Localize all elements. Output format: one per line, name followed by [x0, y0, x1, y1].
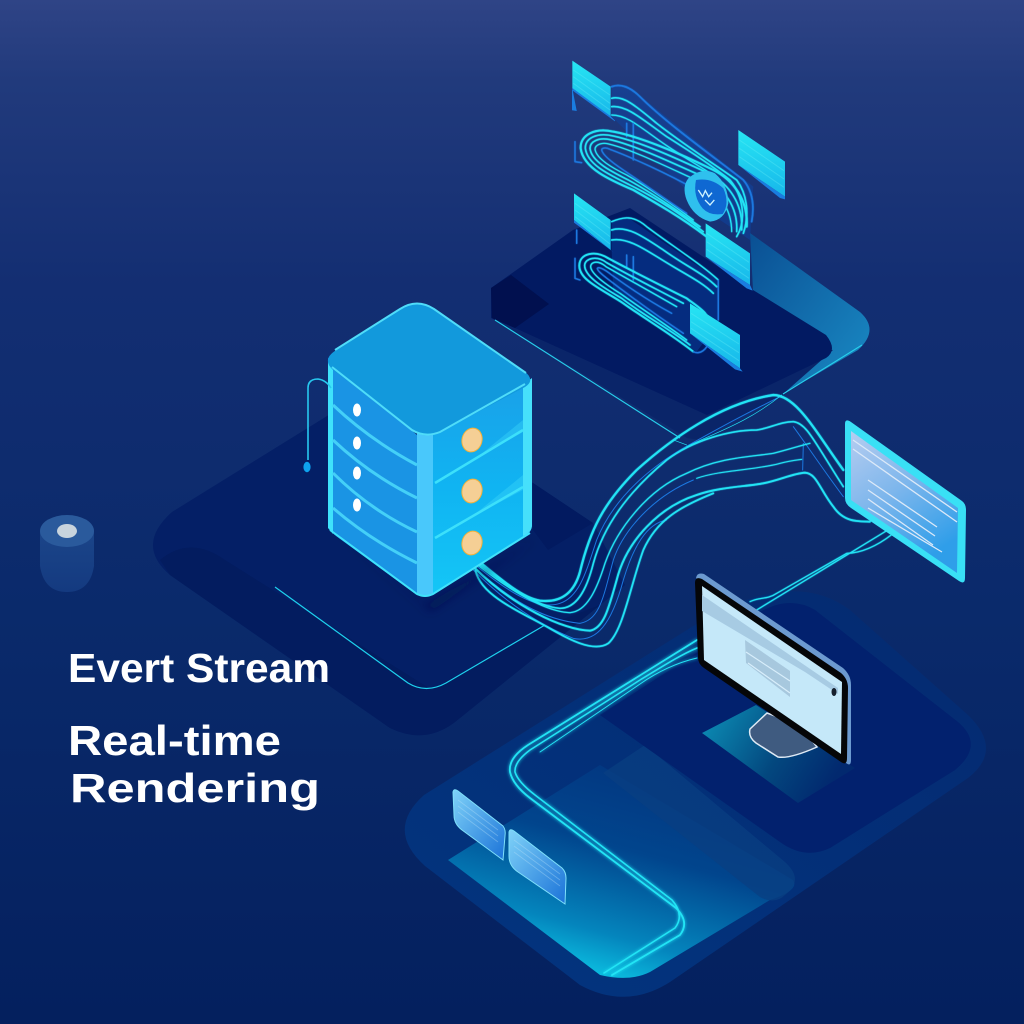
subtitle: Real-time Rendering: Real-time — [68, 717, 281, 764]
server bottom rim — [330, 530, 530, 596]
subtitle: Real-time Rendering — [68, 717, 320, 811]
platform shade — [160, 548, 600, 735]
data panel 5 — [690, 303, 743, 372]
orange status LEDs — [459, 426, 485, 557]
panel frame — [845, 420, 966, 582]
event stream cables — [473, 395, 893, 647]
data panel 1 — [572, 61, 615, 121]
swirl back plates — [612, 85, 753, 352]
cylinder top — [40, 515, 94, 547]
platform body — [153, 408, 625, 735]
lower stream lines — [575, 218, 718, 320]
server shadow — [328, 525, 538, 610]
monitor back edge — [696, 574, 851, 764]
thin blue cables — [473, 395, 843, 639]
small document panels — [453, 790, 566, 904]
document panel 2 — [509, 830, 566, 904]
panel: upper platform — [491, 208, 870, 440]
monitor screen — [702, 586, 842, 754]
monitor bezel — [695, 578, 848, 763]
floor under monitor — [702, 705, 855, 803]
monitor header band — [702, 595, 838, 694]
wedge shadow — [533, 483, 593, 550]
lit floor — [448, 765, 794, 978]
server left dividers — [333, 405, 417, 563]
icon: desktop monitor — [695, 574, 851, 764]
data panel 4 — [706, 223, 753, 291]
server left face — [328, 358, 417, 595]
server top face — [328, 304, 530, 436]
monitor content lines — [746, 652, 790, 693]
server top rim — [332, 304, 526, 435]
icon: cylinder — [40, 515, 94, 592]
icon: server rack — [303, 304, 538, 610]
upper stream lines — [575, 85, 753, 237]
central hub — [685, 171, 728, 222]
cyan cables — [473, 395, 870, 647]
platform shadow side — [491, 275, 549, 328]
wire end node — [303, 462, 311, 472]
monitor camera — [832, 688, 836, 696]
monitor inner platform — [600, 603, 971, 853]
server wire — [308, 379, 331, 460]
server left rim — [328, 360, 333, 534]
server right dividers — [435, 430, 523, 538]
panel text lines — [853, 440, 957, 552]
cylinder light — [57, 524, 77, 538]
cables to monitor — [750, 527, 893, 610]
platform outer slab — [405, 591, 986, 997]
upper loop lines — [581, 130, 747, 237]
lower loop lines — [579, 254, 710, 353]
panel screen — [851, 431, 958, 573]
monitor content block — [745, 640, 790, 697]
platform outline — [275, 587, 545, 688]
server corner column — [417, 432, 433, 596]
panel: server platform — [153, 408, 625, 735]
server right rim — [523, 378, 532, 536]
data panel 3 — [574, 193, 615, 253]
server right highlight — [470, 420, 523, 518]
upper swirl streams and panels — [572, 61, 785, 372]
lower platform layer — [492, 318, 833, 440]
document panel 1 — [453, 790, 505, 860]
diagonal strip — [603, 745, 795, 901]
server right face — [433, 380, 532, 595]
platform outline — [495, 320, 862, 438]
platform top — [491, 208, 832, 415]
cylinder body — [40, 531, 94, 592]
title: Event Stream: Evert Stream — [68, 645, 330, 691]
floating browser panel — [845, 420, 966, 582]
light edge band — [750, 233, 870, 394]
white status LEDs — [353, 404, 361, 512]
cables: monitor to lit floor — [510, 640, 697, 975]
subtitle: Real-time Rendering: Rendering — [70, 765, 320, 811]
data panel 2 — [738, 130, 785, 199]
panel: bottom platform — [405, 591, 986, 997]
monitor stand — [750, 713, 817, 757]
